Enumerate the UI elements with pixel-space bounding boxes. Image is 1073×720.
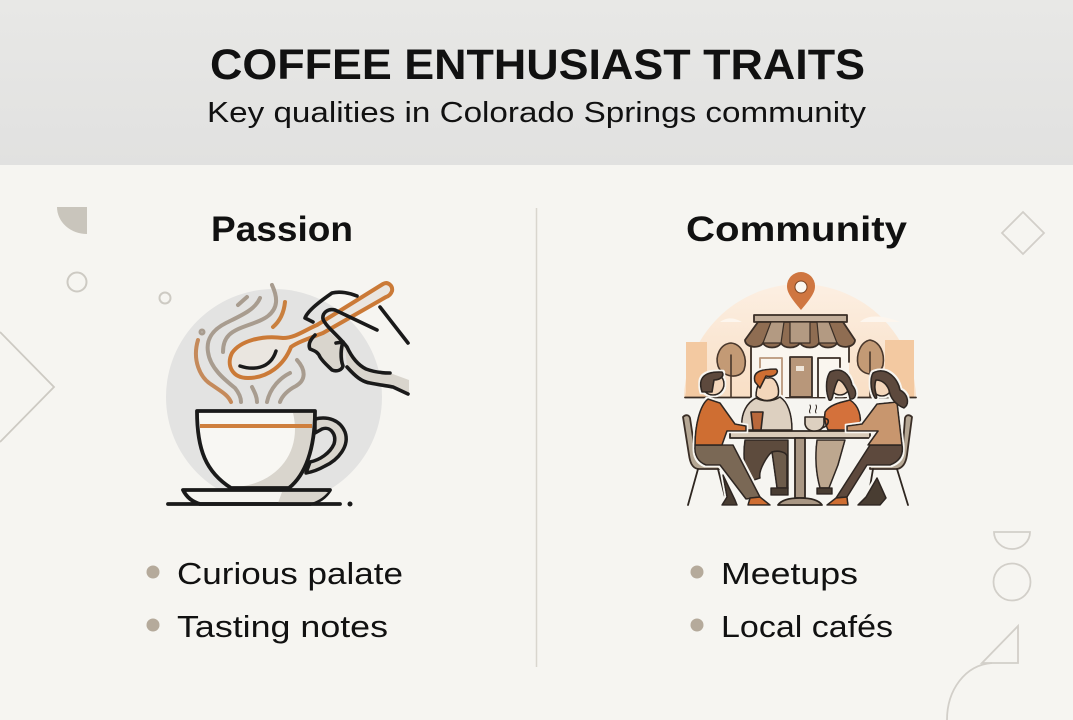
chairs — [683, 415, 912, 469]
icon: coffee cup with spoon — [166, 283, 409, 506]
bullet list: passion: Curious palate — [177, 556, 403, 591]
bullet list: community: Meetups — [721, 556, 858, 591]
hand shading — [345, 345, 409, 394]
heading: passion: Passion — [211, 210, 353, 249]
cafe building — [752, 345, 849, 397]
awning — [754, 315, 847, 322]
bullet list: passion: Tasting notes — [177, 609, 388, 644]
person 1 — [695, 372, 770, 505]
map pin — [787, 272, 815, 310]
hand — [305, 292, 408, 394]
spoon — [230, 283, 392, 378]
heading: community: Community — [686, 210, 908, 249]
table — [730, 431, 870, 505]
cup stripe — [200, 424, 312, 428]
header band — [0, 0, 1073, 165]
bullet list: community: Local cafés — [721, 609, 893, 644]
saucer — [183, 490, 330, 504]
steam — [196, 285, 304, 402]
door — [790, 357, 812, 397]
person 3 — [816, 370, 861, 494]
divider — [536, 208, 538, 667]
trees — [717, 340, 883, 397]
cup handle — [306, 418, 346, 473]
horizon — [685, 396, 916, 398]
panel: community — [683, 210, 916, 644]
drink cup — [751, 412, 763, 430]
decorative shapes: right — [947, 212, 1044, 720]
icon: cafe meetup — [683, 272, 916, 516]
cup body — [197, 411, 315, 488]
decorative shapes: left — [0, 207, 170, 442]
person 2 — [742, 369, 792, 495]
sunset backdrop — [684, 285, 916, 398]
person 4 — [827, 371, 907, 505]
panel: passion — [146, 210, 409, 644]
coffee cup on table — [805, 405, 828, 431]
bullet list: community — [690, 556, 893, 644]
subtitle: Key qualities in Colorado Springs community — [207, 97, 867, 129]
bullet list: passion — [146, 556, 403, 644]
title: COFFEE ENTHUSIAST TRAITS — [210, 41, 865, 89]
